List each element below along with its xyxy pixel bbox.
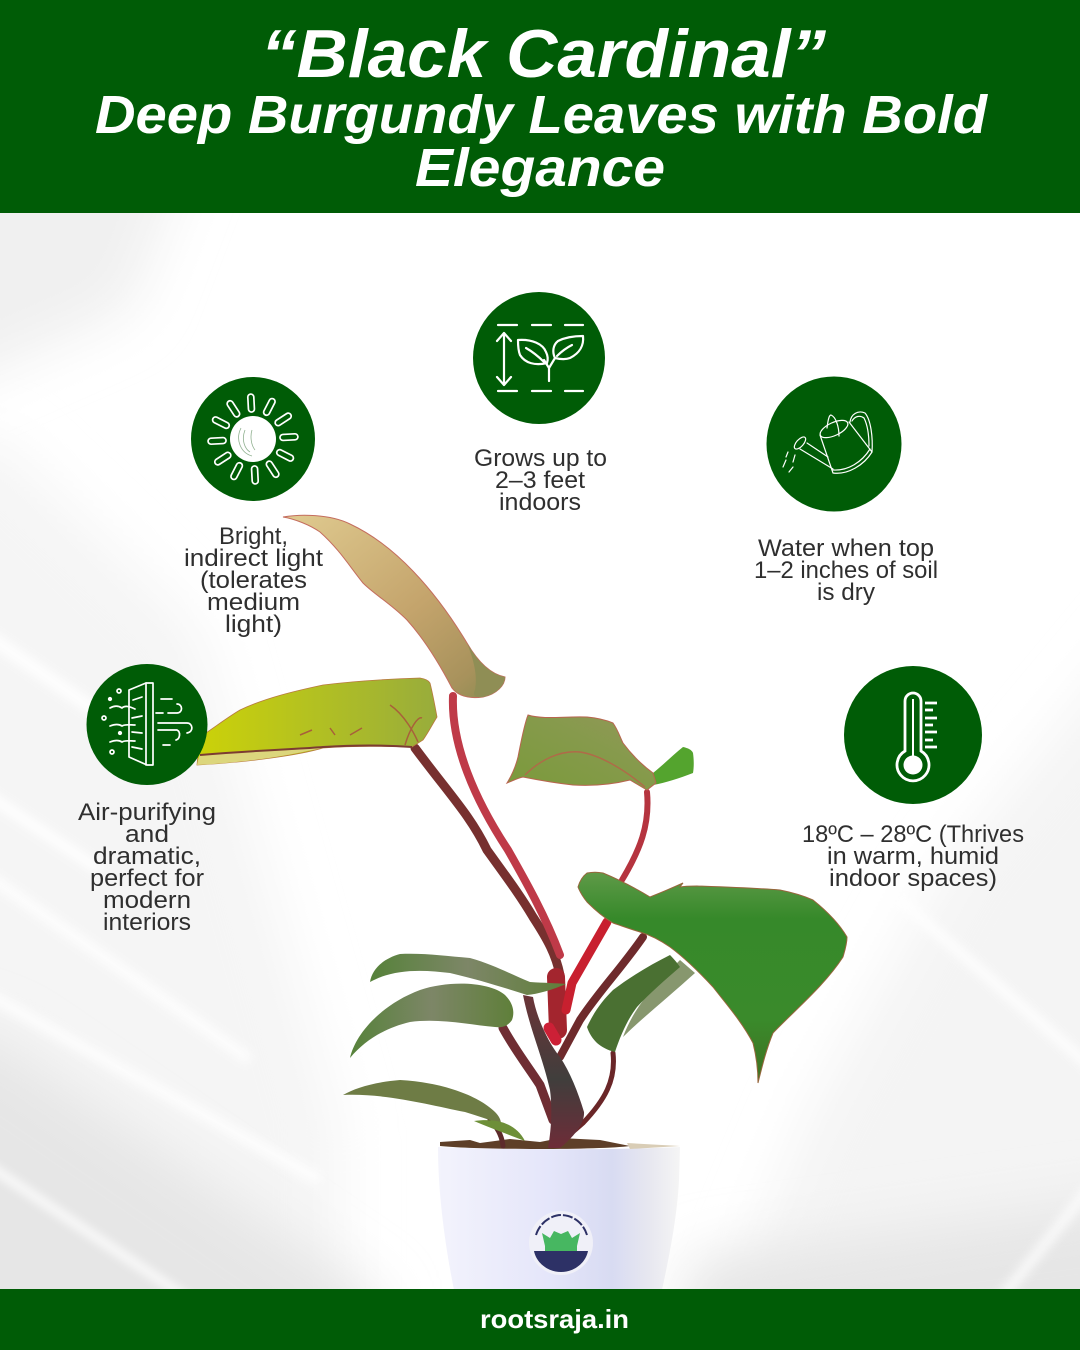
text: light: Bright, <box>219 523 288 550</box>
icon: sun <box>191 377 315 501</box>
icon: air purifying <box>86 664 208 785</box>
text: air purifying: perfect for <box>90 865 204 892</box>
leaf: lower left middle <box>350 984 513 1058</box>
subtitle: Elegance <box>415 138 665 198</box>
leaf: top tan <box>283 515 505 698</box>
text: light <box>184 523 323 638</box>
leaf: lower left bottom <box>343 1080 501 1124</box>
text: temperature: in warm, humid <box>827 843 999 870</box>
icon: thermometer <box>844 666 982 804</box>
text: temperature: indoor spaces) <box>829 865 997 892</box>
text: air purifying <box>78 799 216 936</box>
text: height: 2–3 feet <box>495 467 585 494</box>
leaf: lower right dark <box>587 955 680 1052</box>
leaf: big green <box>578 872 847 1083</box>
text: height: indoors <box>499 489 581 516</box>
leaf vein: small olive midrib <box>525 752 645 787</box>
leaf: yellow green <box>197 678 437 765</box>
leaf veins: yellow green side veins <box>300 705 422 745</box>
leaf vein: yellow green leaf midrib <box>200 746 412 755</box>
plant photo illustration <box>197 515 847 1290</box>
subtitle: Deep Burgundy Leaves with Bold <box>95 85 988 145</box>
text: height <box>474 445 607 516</box>
pot <box>438 1138 680 1290</box>
text: height: Grows up to <box>474 445 607 472</box>
text: water <box>754 535 938 606</box>
title: “Black Cardinal” <box>261 16 826 92</box>
leaf: lower right light <box>623 960 695 1037</box>
stems <box>415 696 648 1146</box>
text: light: (tolerates <box>200 567 307 594</box>
text: air purifying: dramatic, <box>93 843 201 870</box>
text: air purifying: interiors <box>103 909 191 936</box>
text: light: light) <box>225 611 282 638</box>
leaf: lower left upper <box>370 954 566 995</box>
text: temperature <box>802 821 1024 892</box>
text: water: is dry <box>817 579 875 606</box>
text: water: 1–2 inches of soil <box>754 557 938 584</box>
leaf: top tan fold <box>467 643 505 697</box>
text: light: medium <box>207 589 300 616</box>
leaf: pale underside strip <box>197 748 323 765</box>
icon: height plant <box>473 292 605 424</box>
text: water: Water when top <box>758 535 934 562</box>
leaf: small olive <box>507 715 656 790</box>
text: light: indirect light <box>184 545 323 572</box>
stem base <box>523 995 584 1148</box>
text: air purifying: Air-purifying <box>78 799 216 826</box>
pot logo <box>529 1211 593 1275</box>
text: air purifying: modern <box>103 887 191 914</box>
icon: watering can <box>766 376 902 512</box>
text: temperature: 18ºC – 28ºC (Thrives <box>802 821 1024 848</box>
leaf: small sprout <box>653 747 694 785</box>
text: air purifying: and <box>125 821 169 848</box>
footer website: rootsraja.in <box>480 1304 629 1334</box>
leaf: tiny sprout <box>474 1120 525 1141</box>
header banner <box>0 0 1080 213</box>
footer banner <box>0 1289 1080 1350</box>
subtitle <box>95 85 988 198</box>
